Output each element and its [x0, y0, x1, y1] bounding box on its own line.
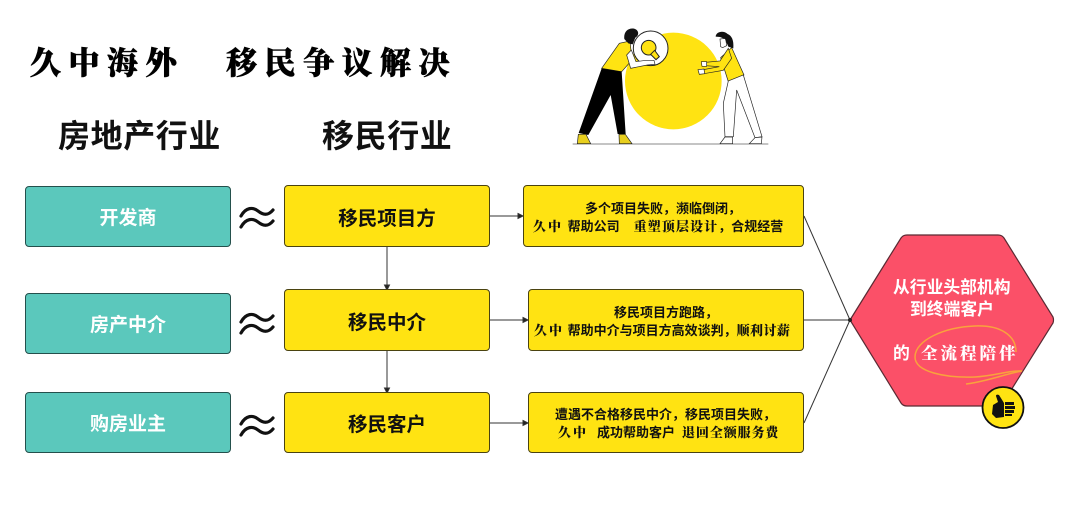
panel: developer [25, 186, 231, 247]
panel: immigration agent: 移民中介 [348, 312, 426, 334]
panel: home buyer: 购房业主 [90, 414, 166, 435]
text line: 移民项目方跑路， [614, 305, 718, 320]
panel: outcome for agent [528, 289, 804, 351]
panel: immigration client: 移民客户 [348, 414, 426, 436]
hexagon text line two: 到终端客户 [910, 300, 994, 319]
panel: home buyer [25, 392, 231, 453]
heading: immigration industry: 移民行业 [322, 118, 452, 154]
title: 久中海外 [30, 46, 184, 81]
panel: immigration client [284, 392, 490, 453]
panel: outcome for project party [523, 185, 804, 247]
text line: 久中 帮助中介与项目方高效谈判，顺利讨薪 [534, 323, 790, 338]
hexagon text: 从行业头部机构 [893, 278, 1010, 297]
panel: immigration project party [284, 185, 490, 247]
panel: property agent [25, 293, 231, 354]
panel: immigration agent [284, 289, 490, 351]
panel: outcome for client [528, 392, 804, 453]
title part two: 移民争议解决 [226, 46, 457, 81]
panel: developer: 开发商 [99, 208, 156, 229]
text line: 遭遇不合格移民中介，移民项目失败， [555, 407, 776, 422]
heading: real estate industry: 房地产行业 [58, 118, 221, 154]
hexagon text line three: 的 [893, 344, 910, 363]
panel: immigration project party: 移民项目方 [338, 208, 436, 230]
hexagon text highlighted: 全流程陪伴 [921, 344, 1018, 363]
panel: property agent: 房产中介 [90, 315, 166, 336]
text line: 多个项目失败，濒临倒闭， [585, 201, 741, 216]
text line: 久中 成功帮助客户 退回全额服务费 [558, 425, 779, 440]
text line: 久中 帮助公司 重塑顶层设计，合规经营 [533, 219, 783, 234]
